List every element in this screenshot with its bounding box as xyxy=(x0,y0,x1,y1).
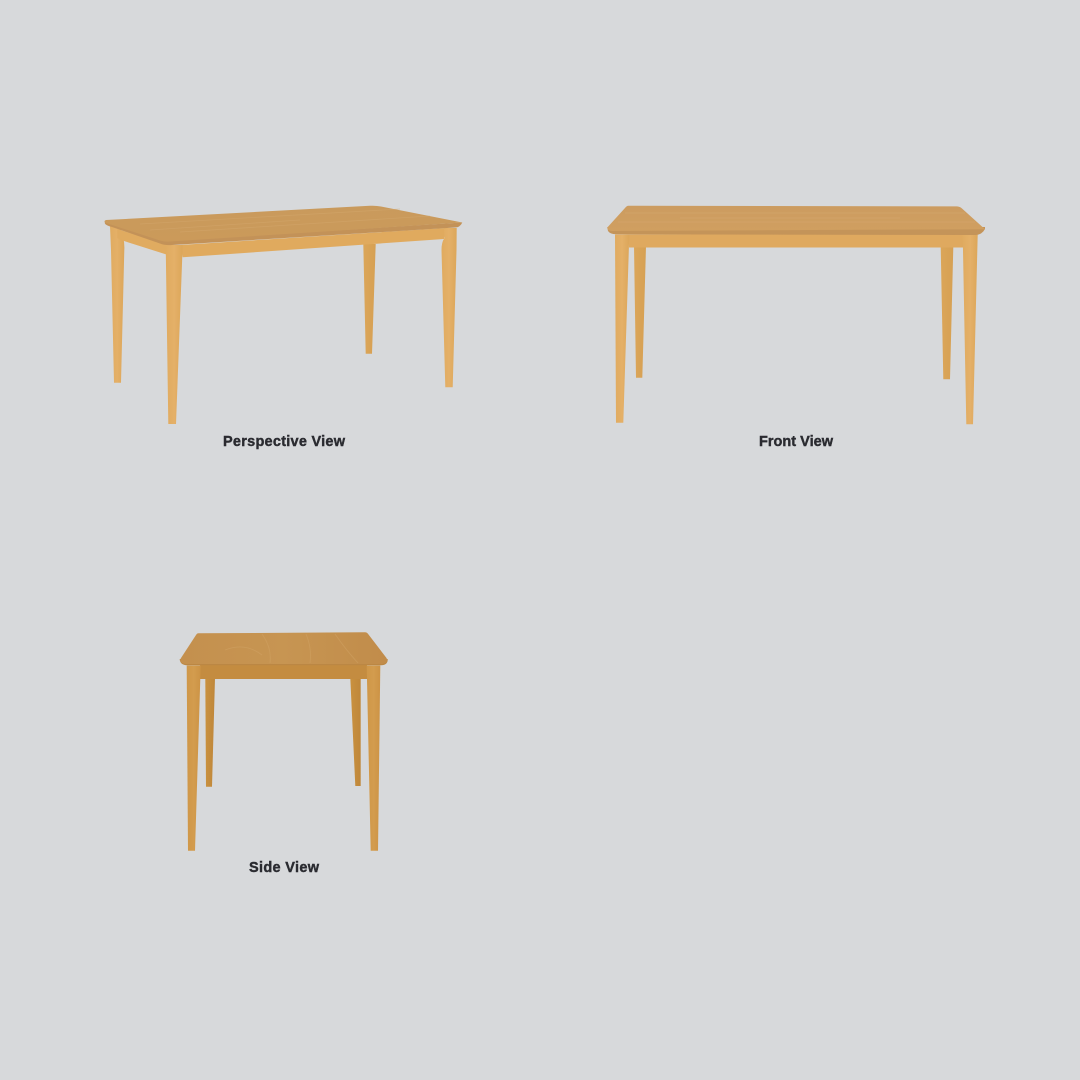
caption: front view: Front View xyxy=(759,434,834,450)
tabletop surface xyxy=(607,206,985,231)
back left leg xyxy=(634,246,646,378)
back right leg xyxy=(350,678,361,786)
wood grain xyxy=(618,213,975,222)
right leg xyxy=(442,228,457,387)
table: front view xyxy=(607,206,985,424)
left front leg xyxy=(615,234,629,423)
tabletop surface xyxy=(180,632,387,664)
right front leg xyxy=(963,234,978,424)
tabletop surface xyxy=(104,206,462,242)
tabletop edge xyxy=(105,222,462,245)
back left leg xyxy=(205,678,215,787)
table: side view xyxy=(180,632,388,851)
caption: perspective view: Perspective View xyxy=(223,434,346,450)
front leg xyxy=(166,245,183,424)
front apron xyxy=(180,228,446,257)
back left leg xyxy=(110,226,124,383)
tabletop edge xyxy=(607,227,985,235)
panel: perspective view xyxy=(104,206,462,450)
table: perspective view xyxy=(104,206,462,424)
caption: side view: Side View xyxy=(249,860,320,876)
back right leg xyxy=(941,247,953,379)
panel: side view xyxy=(180,632,388,876)
wood grain xyxy=(225,634,358,663)
left front leg xyxy=(187,666,201,851)
tabletop edge xyxy=(180,659,388,665)
apron xyxy=(629,234,964,248)
wood grain xyxy=(140,209,430,232)
panel: front view xyxy=(607,206,985,450)
apron xyxy=(200,665,367,679)
back right leg xyxy=(363,244,376,354)
left apron xyxy=(117,229,168,255)
right front leg xyxy=(367,666,380,851)
